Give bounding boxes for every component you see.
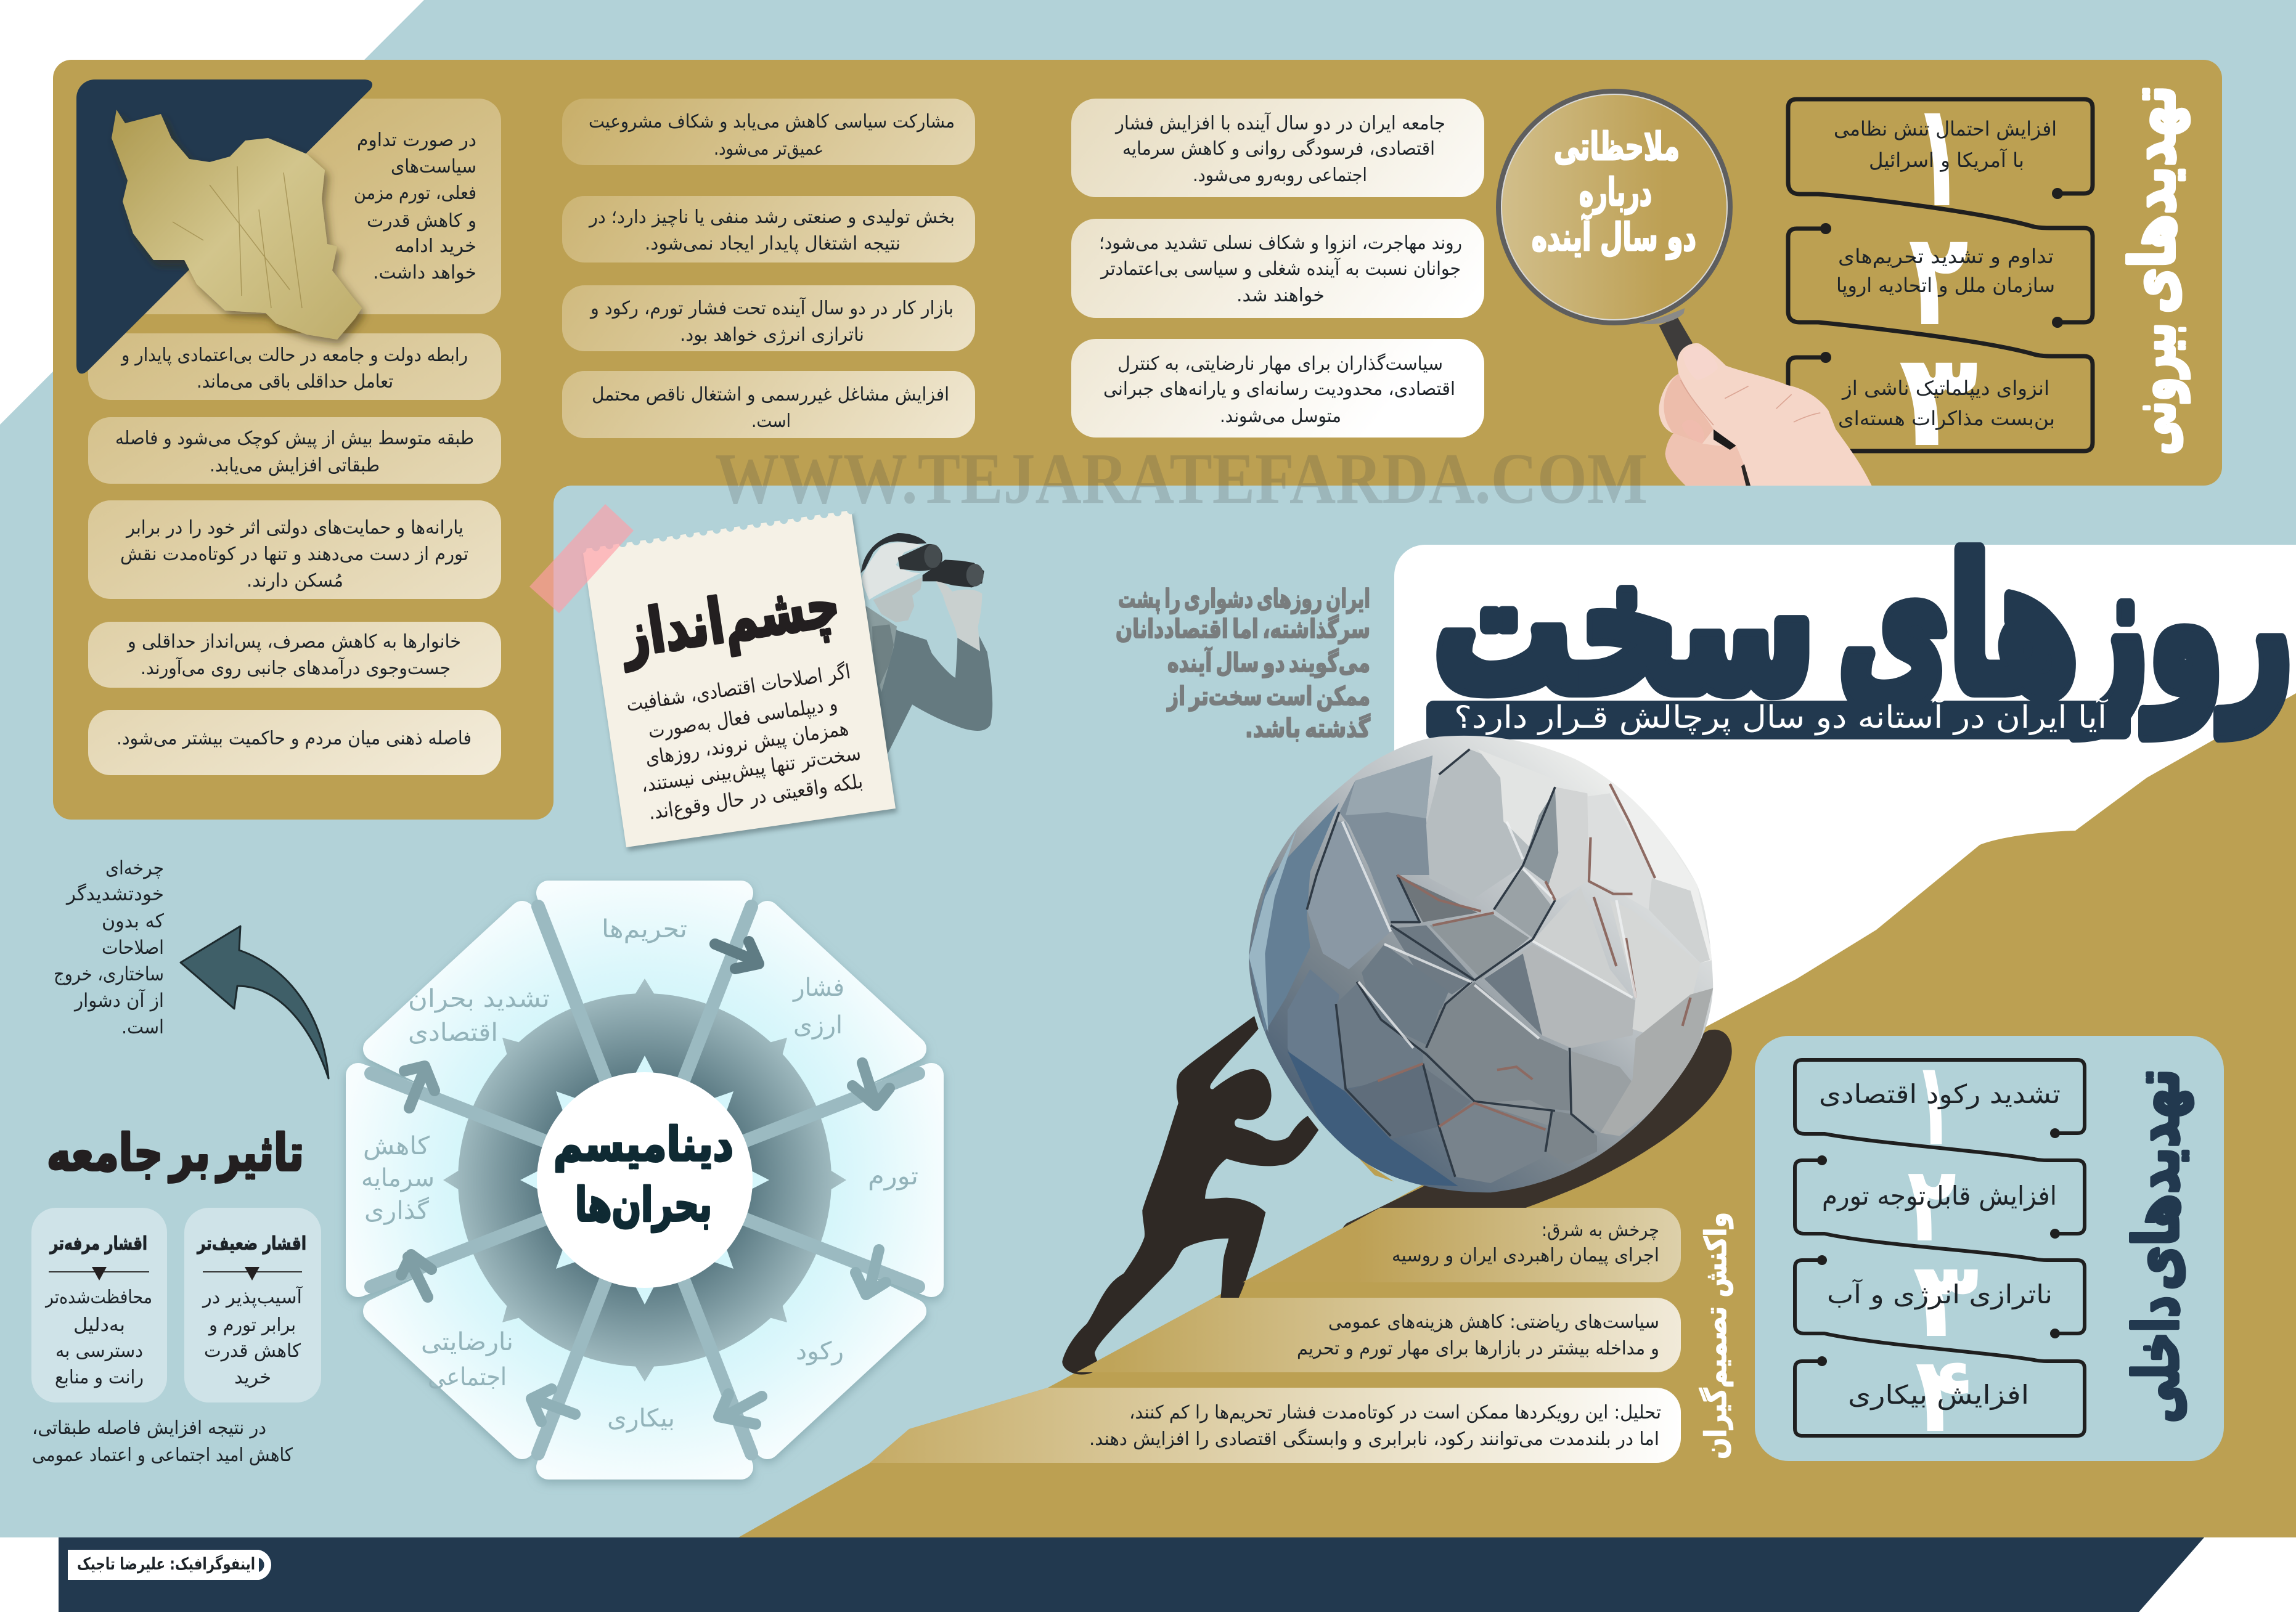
title xyxy=(1433,519,2293,736)
card: wealthier groups: محافظت‌شده‌تر xyxy=(44,1287,152,1308)
text: self-reinforcing cycle xyxy=(54,857,164,1038)
body text: اگر اصلاحات اقتصادی، شفافیت xyxy=(625,659,852,716)
card: society xyxy=(1071,99,1484,197)
panel: outlook note xyxy=(529,504,896,847)
text: threat list: سازمان ملل و اتحادیه اروپا xyxy=(1836,274,2055,297)
card: middle class: طبقه متوسط بیش از پیش کوچک می‌شود و فاصله xyxy=(115,428,474,449)
card: wealthier groups: اقشار مرفه‌تر xyxy=(49,1233,147,1255)
reaction cards xyxy=(801,1208,1681,1463)
text: threat list: افزایش بیکاری xyxy=(1848,1380,2029,1410)
numerals: ۳ xyxy=(1898,325,1979,476)
gold mountain xyxy=(738,693,2296,1537)
text: intro paragraph xyxy=(1116,584,1370,743)
panel: external threats xyxy=(1788,71,2189,476)
text: self-reinforcing cycle: چرخه‌ای xyxy=(105,857,164,879)
text: reactions: اما در بلندمدت می‌توانند رکود، نابرابری و وابستگی اقتصادی را افزایش دهند. xyxy=(1089,1428,1659,1450)
connector bracket xyxy=(1795,1060,2085,1436)
icon: map of Iran xyxy=(112,110,362,340)
text: result for society xyxy=(32,1417,293,1466)
text: threat list xyxy=(1819,1079,2061,1410)
card: households xyxy=(88,622,501,688)
card: weaker groups: اقشار ضعیف‌تر xyxy=(196,1233,306,1255)
paper xyxy=(582,510,896,847)
shadow crescent under boulder xyxy=(1342,1030,1732,1243)
text: reactions xyxy=(1089,1219,1661,1450)
numerals: ۲ xyxy=(1908,204,1969,355)
panel: middle column findings xyxy=(562,99,975,438)
text: threat list: بن‌بست مذاکرات هسته‌ای xyxy=(1838,407,2055,430)
card: informal jobs xyxy=(562,371,975,438)
centre heading: بحران‌ها xyxy=(575,1177,712,1232)
card: continuation of policies: در صورت تداوم xyxy=(357,129,476,151)
numerals xyxy=(1898,71,1979,476)
segment labels: ارزی xyxy=(793,1011,843,1040)
subtitle bar: آیا ایران در آستانه دو سال پرچالش قـرار دارد؟ xyxy=(1454,699,2108,736)
card: state and society xyxy=(88,333,501,400)
vertical heading: واکنش تصمیم‌گیران xyxy=(1699,1212,1733,1459)
card: continuation of policies: خواهد داشت. xyxy=(373,262,476,283)
heading: چشم‌انداز xyxy=(615,568,844,672)
body text: بلکه واقعیتی در حال وقوع‌اند. xyxy=(647,769,864,824)
arrows between segments xyxy=(401,942,889,1424)
card: society: اقتصادی، فرسودگی روانی و کاهش سرمایه xyxy=(1122,138,1435,160)
text: intro paragraph: می‌گویند دو سال آینده xyxy=(1167,647,1370,678)
text: threat list: تداوم و تشدید تحریم‌های xyxy=(1838,245,2054,268)
card: production sector xyxy=(562,196,975,263)
segment labels: تحریم‌ها xyxy=(602,915,687,943)
text: self-reinforcing cycle: از آن دشوار xyxy=(73,988,164,1012)
handle xyxy=(1659,317,1693,362)
watermark: WWW.TEJARATEFARDA.COM xyxy=(715,438,1648,519)
card: wealthier groups: به‌دلیل xyxy=(73,1314,125,1336)
card: state and society: رابطه دولت و جامعه در حالت بی‌اعتمادی پایدار و xyxy=(120,344,468,366)
gear xyxy=(443,979,846,1382)
panel: internal threats xyxy=(1755,1036,2224,1461)
lens heading: ملاحظاتی xyxy=(1554,124,1680,169)
card: continuation of policies: فعلی، تورم مزمن xyxy=(354,182,476,204)
card: weaker groups: کاهش قدرت xyxy=(204,1340,301,1362)
card: wealthier groups: دسترسی به xyxy=(55,1340,143,1362)
text: intro paragraph: ایران روزهای دشواری را پشت xyxy=(1118,584,1370,614)
text: threat list: با آمریکا و اسرائیل xyxy=(1869,148,2024,172)
card: production sector: بخش تولیدی و صنعتی رشد منفی یا ناچیز دارد؛ در xyxy=(588,206,955,228)
card: policymakers xyxy=(1071,339,1484,438)
card: policymakers: متوسل می‌شوند. xyxy=(1220,405,1341,427)
card: political participation: مشارکت سیاسی کاهش می‌یابد و شکاف مشروعیت xyxy=(589,111,955,132)
text: threat list: افزایش قابل‌توجه تورم xyxy=(1822,1181,2057,1211)
icon: curved arrow xyxy=(181,926,329,1078)
card: informal jobs: افزایش مشاغل غیررسمی و اشتغال ناقص محتمل xyxy=(592,384,949,405)
heading: impact on society: تاثیر بر جامعه xyxy=(47,1124,304,1183)
numerals: ۲ xyxy=(1907,1144,1956,1266)
vertical heading xyxy=(2120,1069,2193,1423)
card: continuation of policies xyxy=(88,99,501,314)
card: migration: روند مهاجرت، انزوا و شکاف نسلی تشدید می‌شود؛ xyxy=(1099,232,1462,254)
numerals xyxy=(1907,1036,1979,1456)
segment labels: فشار xyxy=(792,974,844,1002)
card: migration: خواهند شد. xyxy=(1236,285,1325,306)
vertical heading: تهدیدهای xyxy=(2120,1069,2193,1290)
vertical heading: داخلی xyxy=(2120,1296,2192,1423)
segment labels: رکود xyxy=(796,1337,844,1366)
icon: magnifier lens xyxy=(1498,91,1730,323)
card: wealthier groups: رانت و منابع xyxy=(55,1367,144,1388)
card: middle class xyxy=(88,417,501,484)
card: subsidies: تورم از دست می‌دهند و تنها در کوتاه‌مدت نقش xyxy=(120,543,468,565)
text: self-reinforcing cycle: خودتشدیدگر xyxy=(65,883,164,905)
title: سخت xyxy=(1433,519,1815,734)
card: production sector: نتیجه اشتغال پایدار ایجاد نمی‌شود. xyxy=(645,233,901,254)
card: subsidies xyxy=(88,500,501,599)
text: intro paragraph: ممکن است سخت‌تر از xyxy=(1167,681,1370,712)
panel: white title area xyxy=(1394,545,2296,1060)
centre heading: دینامیسم xyxy=(554,1117,733,1172)
segment labels: اجتماعی xyxy=(428,1363,507,1391)
card: weaker groups xyxy=(184,1208,321,1402)
card: labour market xyxy=(562,285,975,351)
card: informal jobs: است. xyxy=(751,410,791,432)
icon: man with binoculars xyxy=(861,533,992,758)
segment labels: تورم xyxy=(868,1162,918,1191)
connector bracket xyxy=(1788,99,2093,451)
card: turn east xyxy=(1171,1208,1681,1282)
segment labels: اقتصادی xyxy=(408,1019,498,1047)
card: subsidies: مُسکن دارند. xyxy=(247,570,343,592)
centre circle xyxy=(537,1072,753,1288)
icon: figure pushing boulder xyxy=(1062,1016,1318,1375)
wheel segments xyxy=(358,893,931,1467)
card: analysis xyxy=(801,1388,1681,1463)
navy triangle xyxy=(76,79,372,373)
card: mental distance xyxy=(88,710,501,775)
segment labels: نارضایتی xyxy=(421,1328,513,1356)
card: mental distance: فاصله ذهنی میان مردم و حاکمیت بیشتر می‌شود. xyxy=(116,728,472,749)
text: intro paragraph: گذشته باشد. xyxy=(1245,713,1370,743)
card: society: اجتماعی روبه‌رو می‌شود. xyxy=(1193,165,1367,186)
segment labels: کاهش xyxy=(363,1132,430,1160)
card: labour market: ناترازی انرژی خواهد بود. xyxy=(680,324,864,346)
footer bar xyxy=(59,1537,2204,1612)
vertical heading: تهدیدهای xyxy=(2117,86,2189,314)
tape xyxy=(529,504,634,613)
card: continuation of policies: و کاهش قدرت xyxy=(367,210,476,232)
text: reactions: اجرای پیمان راهبردی ایران و روسیه xyxy=(1392,1245,1659,1266)
card: weaker groups: خرید xyxy=(234,1367,271,1388)
card: society: جامعه ایران در دو سال آینده با افزایش فشار xyxy=(1114,112,1445,134)
card: households: جست‌وجوی درآمدهای جانبی روی می‌آورند. xyxy=(141,657,451,679)
card: political participation xyxy=(562,99,975,165)
segment labels: بیکاری xyxy=(607,1404,675,1433)
segment labels xyxy=(361,915,918,1433)
text: self-reinforcing cycle: ساختاری، خروج xyxy=(54,963,164,985)
text: threat list: افزایش احتمال تنش نظامی xyxy=(1834,117,2057,140)
text: result for society: در نتیجه افزایش فاصله طبقاتی، xyxy=(32,1417,266,1439)
text: threat list: انزوای دیپلماتیک ناشی از xyxy=(1841,377,2049,400)
card: wealthier groups xyxy=(31,1208,167,1402)
credit badge: اینفوگرافیک: علیرضا تاجیک xyxy=(77,1554,255,1574)
text: reactions: سیاست‌های ریاضتی: کاهش هزینه‌های عمومی xyxy=(1328,1311,1659,1333)
text: self-reinforcing cycle: که بدون xyxy=(102,910,164,932)
body text xyxy=(625,659,864,824)
segment labels: سرمایه xyxy=(361,1164,435,1192)
segment labels: گذاری xyxy=(364,1197,430,1225)
card: austerity xyxy=(1048,1298,1681,1372)
numerals: ۴ xyxy=(1915,1334,1972,1456)
vertical heading: بیرونی xyxy=(2117,323,2189,455)
body text: سخت‌تر تنها پیش‌بینی نیستند، xyxy=(640,741,862,797)
card: continuation of policies: سیاست‌های xyxy=(391,156,476,177)
text: intro paragraph: سرگذاشته، اما اقتصاددانان xyxy=(1116,614,1370,645)
spokes xyxy=(371,906,918,1454)
panel: left column findings xyxy=(76,79,501,775)
panel: gold top and left frame xyxy=(53,60,2222,820)
text: self-reinforcing cycle: اصلاحات xyxy=(102,937,164,959)
text: threat list: ناترازی انرژی و آب xyxy=(1827,1279,2053,1309)
panel: decision-makers' reaction xyxy=(801,1208,1733,1463)
centre heading xyxy=(554,1117,733,1232)
card: political participation: عمیق‌تر می‌شود. xyxy=(714,138,823,160)
body text: همزمان پیش نروند، روزهای xyxy=(643,716,850,770)
text: reactions: چرخش به شرق: xyxy=(1542,1219,1659,1241)
diagram: crisis dynamics wheel xyxy=(358,893,931,1467)
panel: right column notes xyxy=(1071,99,1484,438)
card: households: خانوارها به کاهش مصرف، پس‌انداز حداقلی و xyxy=(126,631,461,653)
segment labels: تشدید بحران xyxy=(408,985,550,1013)
body text: و دیپلماسی فعال به‌صورت xyxy=(647,691,839,743)
card: continuation of policies: خرید ادامه xyxy=(394,235,476,257)
lens heading: درباره xyxy=(1579,169,1652,214)
card: subsidies: یارانه‌ها و حمایت‌های دولتی اثر خود را در برابر xyxy=(125,517,464,539)
card: weaker groups: برابر تورم و xyxy=(208,1314,296,1336)
text: self-reinforcing cycle: است. xyxy=(121,1016,164,1038)
text: reactions: تحلیل: این رویکردها ممکن است در کوتاه‌مدت فشار تحریم‌ها را کم کنند، xyxy=(1129,1402,1661,1423)
icon: hand holding magnifier xyxy=(1640,308,1872,486)
card: weaker groups: آسیب‌پذیر در xyxy=(202,1286,303,1308)
numerals: ۱ xyxy=(1912,71,1965,240)
card: state and society: تعامل حداقلی باقی می‌ماند. xyxy=(197,371,393,393)
text: result for society: کاهش امید اجتماعی و اعتماد عمومی xyxy=(32,1444,293,1466)
text: reactions: و مداخله بیشتر در بازارها برای مهار تورم و تحریم xyxy=(1297,1338,1659,1359)
card: migration xyxy=(1071,219,1484,318)
text: threat list: تشدید رکود اقتصادی xyxy=(1819,1079,2061,1109)
lens heading xyxy=(1532,124,1696,259)
card: policymakers: اقتصادی، محدودیت رسانه‌ای و یارانه‌های جبرانی xyxy=(1103,378,1455,400)
numerals: ۱ xyxy=(1913,1036,1954,1172)
card: migration: جوانان نسبت به آینده شغلی و سیاسی بی‌اعتمادتر xyxy=(1100,258,1461,280)
vertical heading xyxy=(2117,86,2189,455)
card: labour market: بازار کار در دو سال آینده تحت فشار تورم، رکود و xyxy=(589,297,954,319)
credit badge xyxy=(68,1550,271,1580)
lens heading: دو سال آینده xyxy=(1532,213,1696,259)
inner star xyxy=(520,1056,769,1305)
text: threat list xyxy=(1834,117,2057,430)
card: policymakers: سیاست‌گذاران برای مهار نارضایتی، به کنترل xyxy=(1117,353,1443,375)
card: middle class: طبقاتی افزایش می‌یابد. xyxy=(210,455,380,476)
numerals: ۳ xyxy=(1913,1239,1979,1361)
icon: boulder xyxy=(1249,736,1713,1192)
